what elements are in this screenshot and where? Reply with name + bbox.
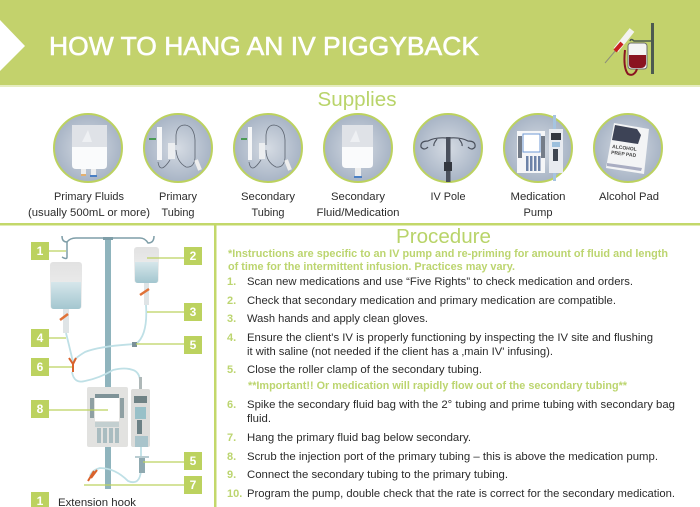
step 2: Check that secondary medication and primary medication are compatible. <box>247 295 616 307</box>
secondary bag <box>134 247 159 305</box>
label: primary fluids: (usually 500mL or more) <box>28 207 150 219</box>
step 5: 5. <box>227 364 236 376</box>
note: instructions <box>228 248 668 273</box>
step 1: 1. <box>227 276 236 288</box>
badge 1: 1 <box>37 244 44 258</box>
header banner <box>0 0 700 87</box>
procedure steps <box>227 276 675 500</box>
badge 3: 3 <box>190 305 197 319</box>
note: instructions: of time for the intermittent infusion. Practices may vary. <box>228 261 515 273</box>
title: HOW TO HANG AN IV PIGGYBACK <box>49 31 480 61</box>
step 4: Ensure the client's IV is properly functioning by inspecting the IV site and flushing <box>247 332 653 344</box>
step 4 <box>227 332 653 358</box>
icon: secondary fluid <box>324 114 392 182</box>
badge 5 <box>184 336 202 354</box>
badge 8: 8 <box>37 402 44 416</box>
step 5: Close the roller clamp of the secondary tubing. <box>247 364 482 376</box>
label: medication pump: Pump <box>524 207 552 219</box>
label: primary fluids <box>28 191 150 219</box>
label: secondary tubing: Tubing <box>252 207 284 219</box>
icon: primary fluids <box>54 114 122 182</box>
step 4: it with saline (not needed if the client has a ‚main IV' infusing). <box>247 346 553 358</box>
legend: extension hook <box>31 492 137 507</box>
step 5: **Important!! Or medication will rapidly flow out of the secondary tubing** <box>248 380 628 392</box>
heading: supplies: Supplies <box>318 89 396 111</box>
heading: procedure: Procedure <box>396 226 491 248</box>
badge 6 <box>31 358 49 376</box>
badge 5: 5 <box>190 338 197 352</box>
step 4: 4. <box>227 332 236 344</box>
step 6: 6. <box>227 399 236 411</box>
step 10: 10. <box>227 488 242 500</box>
diagram: iv setup <box>31 236 202 494</box>
badge 8 <box>31 400 49 418</box>
label: primary fluids: Primary Fluids <box>54 191 124 203</box>
icon: primary tubing <box>144 114 212 182</box>
badge 1 <box>31 242 49 260</box>
badge 6: 6 <box>37 360 44 374</box>
badge 3 <box>184 303 202 321</box>
label: primary tubing <box>159 191 197 219</box>
badge 4 <box>31 329 49 347</box>
step 7: Hang the primary fluid bag below secondary. <box>247 432 471 444</box>
badge 5 lower: 5 <box>190 454 197 468</box>
step 10: Program the pump, double check that the rate is correct for the secondary medication. <box>247 488 675 500</box>
icon: blood bag and syringe <box>605 23 654 75</box>
badge 2 <box>184 247 202 265</box>
lower tubing <box>90 447 141 482</box>
label: primary tubing: Tubing <box>162 207 194 219</box>
pole <box>105 240 111 489</box>
icon: secondary tubing <box>234 114 302 182</box>
step 9: Connect the secondary tubing to the primary tubing. <box>247 469 508 481</box>
label: secondary fluid: Secondary <box>331 191 386 203</box>
step 8: Scrub the injection port of the primary tubing – this is above the medication pump. <box>247 451 658 463</box>
label: secondary tubing <box>241 191 296 219</box>
step 2: 2. <box>227 295 236 307</box>
label: secondary fluid <box>316 191 400 219</box>
step 6: Spike the secondary fluid bag with the 2° tubing and prime tubing with secondary bag <box>247 399 675 411</box>
badge 7 <box>184 476 202 494</box>
step 3: 3. <box>227 313 236 325</box>
panel: supplies <box>28 114 662 219</box>
step 3: Wash hands and apply clean gloves. <box>247 313 428 325</box>
label: iv pole: IV Pole <box>430 191 466 203</box>
medication pump <box>87 377 150 447</box>
label: medication pump: Medication <box>510 191 566 203</box>
label: medication pump <box>510 191 566 219</box>
step 6: fluid. <box>247 413 271 425</box>
label: primary tubing: Primary <box>159 191 197 203</box>
icon: iv pole <box>414 114 482 182</box>
step 6 <box>227 399 675 425</box>
icon: medication pump <box>504 114 572 182</box>
label: secondary tubing: Secondary <box>241 191 296 203</box>
tubing <box>66 305 146 362</box>
label: alcohol pad: Alcohol Pad <box>599 191 659 203</box>
step 7: 7. <box>227 432 236 444</box>
label: secondary fluid: Fluid/Medication <box>316 207 400 219</box>
badge 5 lower <box>184 452 202 470</box>
badge 7: 7 <box>190 478 197 492</box>
icon: alcohol pad: ALCOHOL <box>612 144 637 153</box>
icon: alcohol pad: PREP PAD <box>611 150 637 159</box>
step 8: 8. <box>227 451 236 463</box>
note: instructions: *Instructions are specific to an IV pump and re-priming for amount of fluid and length <box>228 248 668 260</box>
badge 4: 4 <box>37 331 44 345</box>
white arrow <box>0 20 25 71</box>
step 9: 9. <box>227 469 236 481</box>
icon: alcohol pad <box>594 114 662 182</box>
step 1: Scan new medications and use “Five Rights” to check medication and orders. <box>247 276 633 288</box>
step 5 <box>227 364 628 392</box>
primary bag <box>50 262 82 333</box>
badge 2: 2 <box>190 249 197 263</box>
connector lines <box>49 251 184 485</box>
